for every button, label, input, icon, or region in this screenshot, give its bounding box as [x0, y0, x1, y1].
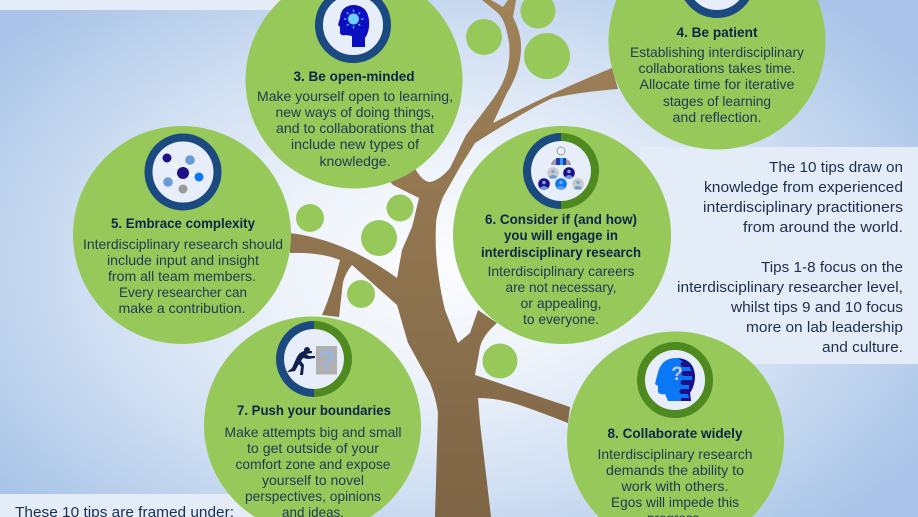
text: right notes: whilst tips 9 and 10 focus	[730, 299, 903, 316]
panel: tip 3	[246, 0, 462, 188]
text: tip 5 body: include input and insight	[107, 252, 259, 268]
text: tip 8 body: Egos will impede this	[611, 494, 739, 510]
text: tip 4 body: stages of learning	[663, 93, 771, 109]
heading: tip 8: 8. Collaborate widely	[608, 425, 743, 441]
text: tip 4 body	[630, 44, 804, 125]
text: right notes: knowledge from experienced	[704, 179, 903, 196]
heading: tip 3: 3. Be open-minded	[294, 68, 414, 84]
text: tip 6 body	[488, 263, 634, 327]
heading: tip 6: interdisciplinary research	[481, 244, 641, 260]
text: right notes: more on lab leadership	[746, 319, 903, 336]
heading: tip 6	[481, 211, 641, 260]
text: tip 7 body: comfort zone and expose	[236, 456, 391, 472]
text: tip 7 body	[224, 424, 402, 517]
text: right notes: The 10 tips draw on	[769, 159, 903, 176]
text: tip 3 body: include new types of	[291, 136, 419, 152]
leaves: small circles	[296, 0, 570, 378]
panel: tip 7	[204, 316, 421, 517]
icon: person pushing box: ?	[319, 345, 334, 375]
icon: head with light	[338, 5, 369, 47]
text: tip 4 body: Establishing interdisciplinary	[630, 44, 804, 60]
panel: right notes background	[640, 147, 918, 364]
text: tip 7 body: yourself to novel	[262, 472, 364, 488]
icon: connected dots	[162, 154, 204, 194]
icon: head with question mark: ?	[671, 364, 683, 385]
text: tip 3 body: and to collaborations that	[276, 120, 434, 136]
text: tip 6 body: to everyone.	[523, 311, 599, 327]
text: tip 3 body: new ways of doing things,	[276, 104, 434, 120]
text: tip 4 body: and reflection.	[672, 109, 762, 125]
heading: tip 4: 4. Be patient	[676, 24, 758, 40]
panel: bottom-left note background	[0, 494, 270, 517]
tree	[290, 0, 618, 517]
text: tip 5 body	[83, 236, 283, 316]
text: right notes: and culture.	[822, 339, 903, 356]
text: tip 5 body: make a contribution.	[118, 300, 246, 316]
panel: tip 5	[73, 126, 291, 344]
text: tip 7 body: to get outside of your	[247, 440, 379, 456]
text: tip 8 body: work with others.	[620, 478, 728, 494]
text: tip 3 body: Make yourself open to learning,	[257, 88, 453, 104]
text: right notes: interdisciplinary researcher level,	[677, 279, 903, 296]
text: tip 8 body: demands the ability to	[606, 462, 744, 478]
heading: tip 6: you will engage in	[504, 227, 618, 243]
heading: tip 6: 6. Consider if (and how)	[485, 211, 637, 227]
panel: top strip	[0, 0, 300, 10]
panel: tip 6	[453, 126, 671, 344]
text: tip 7 body: Make attempts big and small	[224, 424, 402, 440]
text: tip 3 body	[257, 88, 453, 169]
panel: tip 4	[608, 0, 826, 150]
text: tip 3 body: knowledge.	[320, 153, 390, 169]
text: tip 6 body: or appealing,	[520, 295, 602, 311]
text: tip 7 body: perspectives, opinions	[245, 488, 381, 504]
text: tip 4 body: collaborations takes time.	[638, 60, 796, 76]
icon: team hierarchy	[538, 147, 584, 190]
text: right notes: Tips 1-8 focus on the	[761, 259, 903, 276]
heading: tip 7: 7. Push your boundaries	[237, 402, 391, 418]
text: right notes: interdisciplinary practitioners	[703, 199, 903, 216]
text: tip 4 body: Allocate time for iterative	[640, 76, 795, 92]
icon: head with question mark	[655, 358, 695, 401]
text: tip 5 body: from all team members.	[108, 268, 256, 284]
text: right notes	[677, 159, 903, 356]
text: tip 8 body	[598, 446, 752, 517]
panel: tip 8	[567, 332, 784, 517]
heading: tip 5: 5. Embrace complexity	[111, 215, 255, 231]
text: tip 8 body: Interdisciplinary research	[598, 446, 752, 462]
icon: person pushing box	[287, 345, 337, 375]
text: tip 6 body: Interdisciplinary careers	[488, 263, 634, 279]
text: tip 6 body: are not necessary,	[506, 279, 616, 295]
text: tip 5 body: Every researcher can	[119, 284, 247, 300]
text: right notes: from around the world.	[743, 219, 903, 236]
text: tip 5 body: Interdisciplinary research should	[83, 236, 283, 252]
